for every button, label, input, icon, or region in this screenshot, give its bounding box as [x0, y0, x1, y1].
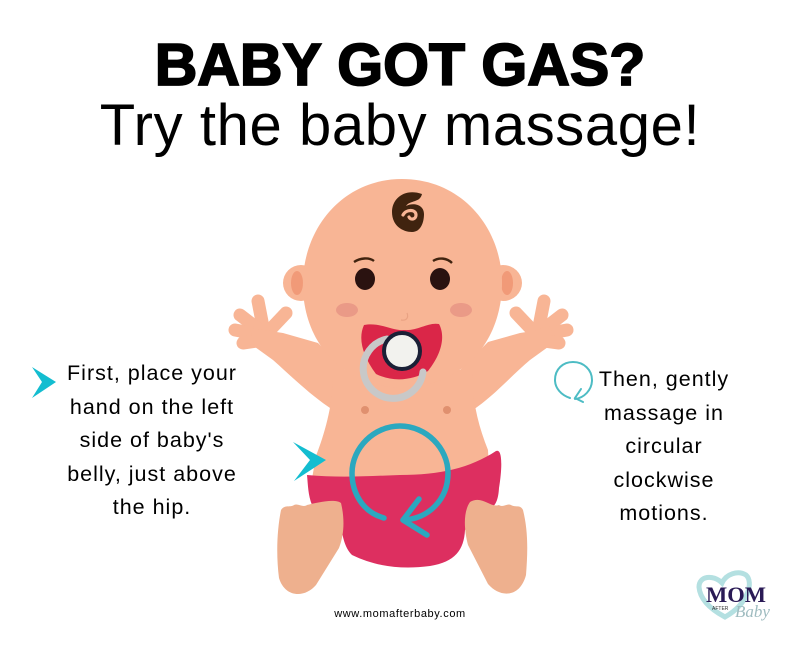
- text: step two: Then, gently: [599, 367, 729, 391]
- illustration: baby: [235, 179, 567, 490]
- head: [303, 179, 502, 388]
- text: step two: [599, 367, 729, 525]
- logo: [706, 582, 770, 621]
- text: step two: massage in: [604, 400, 724, 424]
- left foot: [277, 501, 343, 594]
- eyebrows: [354, 258, 452, 263]
- nipples: [361, 406, 451, 414]
- logo: MOM: [706, 582, 766, 607]
- hair curl: [392, 192, 424, 232]
- nose: [401, 313, 408, 320]
- text: step one: First, place your: [67, 361, 237, 385]
- cheeks: [336, 303, 472, 317]
- icon: placement arrow on belly: [293, 442, 326, 481]
- text: step one: the hip.: [113, 495, 191, 519]
- logo: Baby: [735, 602, 770, 621]
- logo heart: [699, 573, 749, 617]
- text: step one: hand on the left: [70, 394, 234, 418]
- right arm and hand: [460, 301, 567, 410]
- text: step one: side of baby's: [80, 428, 224, 452]
- torso: [310, 370, 490, 490]
- mouth: [361, 324, 442, 379]
- logo: AFTER: [712, 606, 728, 612]
- circular massage arrow: [352, 426, 448, 535]
- diaper: [307, 451, 501, 568]
- text: step two: motions.: [619, 501, 709, 525]
- text: step one: belly, just above: [67, 462, 237, 486]
- text: step two: clockwise: [614, 468, 714, 492]
- eyes: [355, 268, 450, 290]
- pacifier button: [384, 333, 420, 369]
- title: BABY GOT GAS?: [155, 32, 645, 98]
- subtitle: Try the baby massage!: [100, 93, 700, 158]
- website url: www.momafterbaby.com: [334, 608, 466, 620]
- right foot: [465, 500, 527, 594]
- text: step two: circular: [625, 434, 703, 458]
- text: step one: [67, 361, 237, 519]
- icon: left chevron: [32, 367, 56, 398]
- icon: small clockwise arrow: [555, 362, 592, 402]
- ears: [283, 265, 522, 301]
- pacifier ring: [363, 339, 423, 398]
- left arm and hand: [235, 301, 345, 410]
